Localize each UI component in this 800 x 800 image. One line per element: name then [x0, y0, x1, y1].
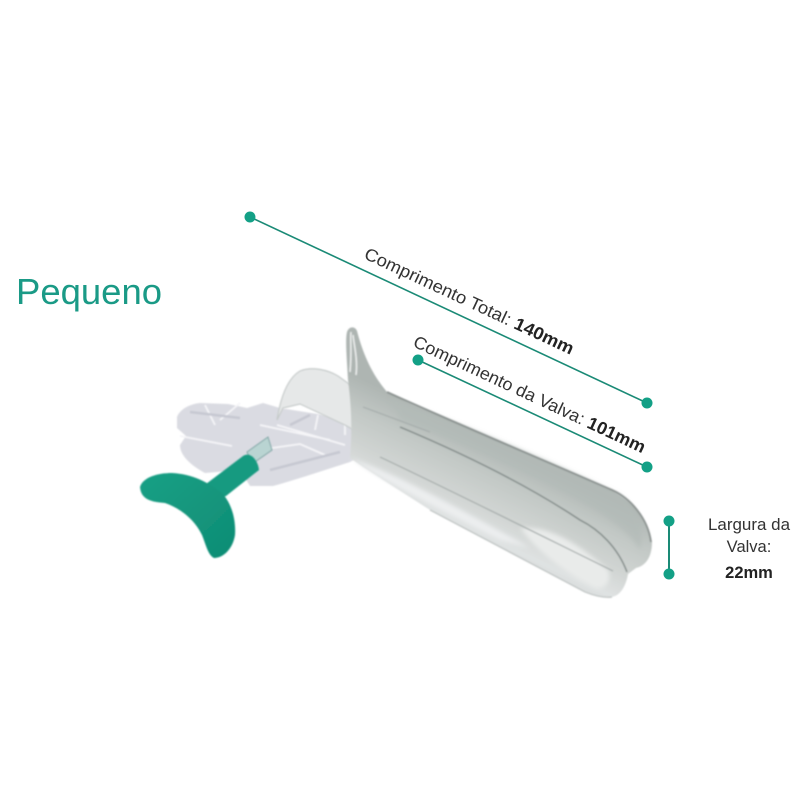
green thumb screw: [140, 455, 259, 558]
tip lower edge: [430, 510, 612, 597]
valve width label: Largura da: [708, 516, 791, 534]
flange: [277, 369, 372, 440]
speculum illustration: [140, 327, 652, 597]
valve width label: 22mm: [725, 564, 773, 582]
central seam: [400, 427, 627, 572]
lower valve highlight: [350, 458, 530, 548]
tip highlight: [520, 528, 609, 588]
threaded post: [247, 437, 272, 464]
dimension: valve length: Comprimento da Valva: 101mm: [410, 331, 649, 457]
title: Pequeno: [16, 271, 162, 312]
dimension: total length: Comprimento Total: 140mm: [361, 243, 577, 358]
upper valve shade: [390, 398, 642, 550]
valve width label: [708, 516, 791, 582]
dimension: total length: [244, 212, 652, 408]
dimension: valve width: [664, 516, 674, 580]
handle block: [177, 403, 372, 486]
valve width label: Valva:: [727, 538, 771, 556]
top edge: [387, 392, 651, 542]
valves: [346, 327, 652, 597]
secondary valve line: [363, 407, 613, 571]
